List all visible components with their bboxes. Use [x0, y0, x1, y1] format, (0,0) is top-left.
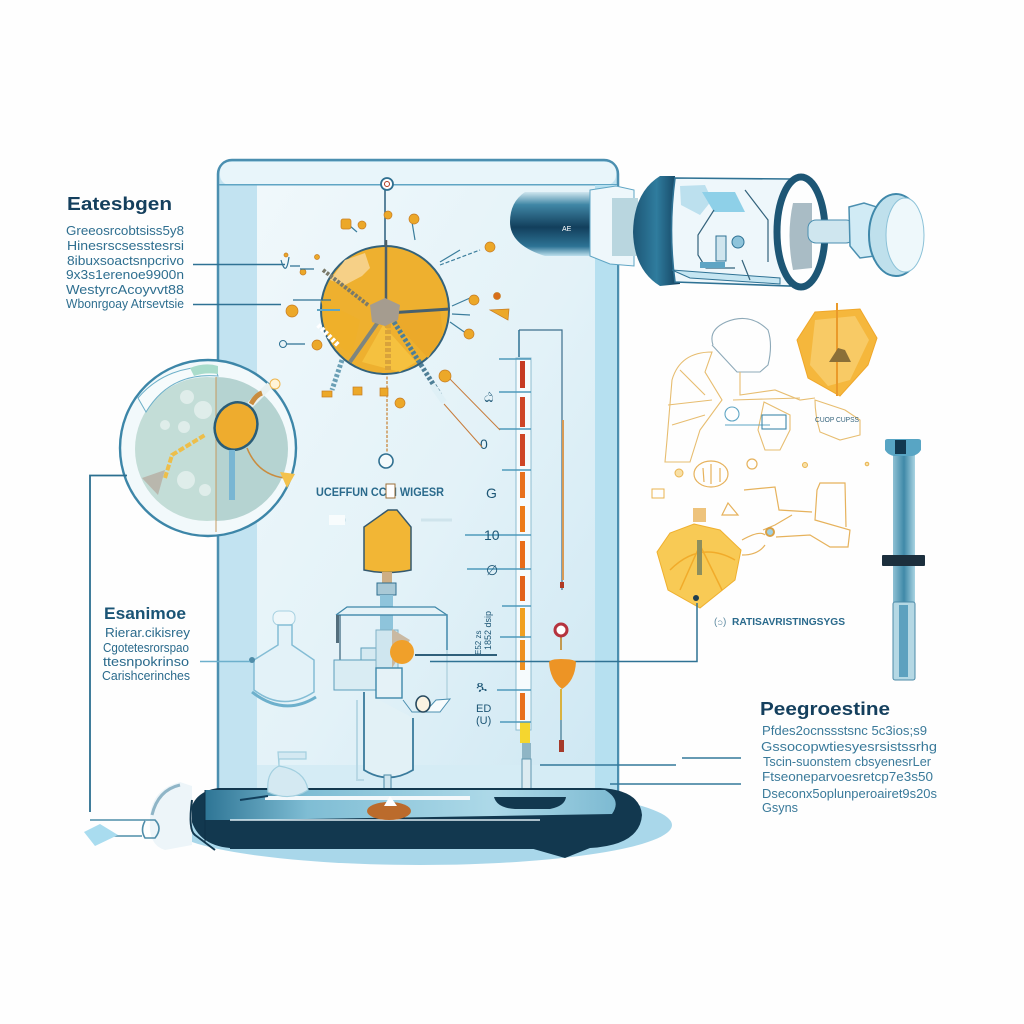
- heading: top left: Eatesbgen: [67, 194, 172, 214]
- text block: middle left: [102, 626, 191, 683]
- leader lines: bottom right: [540, 758, 741, 784]
- node: [766, 528, 774, 536]
- hub: [370, 298, 400, 326]
- small dots: [652, 462, 869, 498]
- scale labels: ඨ: [484, 389, 493, 405]
- text block: top left: Wbonrgoay Atrsevtsie: [66, 297, 184, 311]
- text block: middle left: Carishcerinches: [102, 669, 190, 683]
- heading: middle left: Esanimoe: [104, 604, 186, 623]
- scale labels: ∅: [486, 562, 498, 578]
- text block: top left: Greeosrcobtsiss5y8: [66, 224, 184, 238]
- small flask: [268, 752, 308, 797]
- text block: bottom right: Dseconx5oplunperoairet9s20s: [762, 787, 937, 801]
- label: apparatus: UCEFFUN CCPI WIGESR: [316, 487, 445, 499]
- panel: glass cabinet: [218, 160, 618, 805]
- scale labels: 0: [480, 436, 488, 452]
- icon mark: (၁): [714, 617, 726, 628]
- heading: bottom right: Peegroestine: [760, 699, 890, 719]
- gold gem: top right: [797, 303, 877, 396]
- text block: bottom right: [761, 724, 937, 815]
- scale labels: G: [486, 485, 497, 501]
- hook: base left: [84, 782, 215, 850]
- outline figure: bottom: [694, 459, 850, 555]
- sun diagram: [279, 178, 509, 468]
- probe bulb: [549, 624, 576, 752]
- amber bottle: [364, 510, 411, 572]
- text block: bottom right: Tscin-suonstem cbsyenesrLer: [763, 755, 931, 769]
- text block: bottom right: Ftseoneparvoesretcp7e3s50: [762, 770, 933, 784]
- text block: top left: 8ibuxsoactsnpcrivo: [67, 254, 184, 268]
- text block: middle left: Rierar.cikisrey: [105, 626, 191, 640]
- main cylinder: [364, 692, 413, 778]
- leader line: gem to probe: [430, 603, 697, 662]
- satellite dots: [284, 211, 509, 408]
- scale tube: [465, 330, 564, 797]
- text block: bottom right: Gsyns: [762, 801, 798, 815]
- scale labels: ED: [476, 703, 491, 715]
- scale labels: (U): [476, 715, 491, 727]
- scale labels: [476, 389, 500, 727]
- text block: bottom right: Gssocopwtiesyesrsistssrhg: [761, 740, 937, 754]
- scale labels: 10: [484, 527, 500, 543]
- label: right middle: RATISAVRISTINGSYGS: [732, 616, 845, 628]
- spokes: [317, 222, 500, 447]
- gold gem: bottom left: [657, 508, 741, 608]
- leader lines: top left: [193, 264, 285, 304]
- leader line: left flask: [200, 660, 250, 662]
- base shadow: [168, 785, 672, 865]
- text block: bottom right: Pfdes2ocnssstsnc 5c3ios;s9: [762, 724, 927, 738]
- apparatus: [329, 484, 497, 805]
- syringe: AE: [562, 226, 572, 233]
- text block: top left: 9x3s1erenoe9900n: [66, 268, 184, 282]
- leader line: lens: [90, 476, 127, 812]
- scale tube: 1852 dsip: [483, 611, 493, 650]
- text block: top left: [66, 224, 184, 311]
- pen device: [882, 439, 925, 680]
- text block: middle left: Cgotetesrorspao: [103, 641, 189, 655]
- vessel: [336, 607, 447, 615]
- text block: middle left: ttesnpokrinso: [103, 655, 189, 669]
- label: outline figure: CUOP CUPSS: [815, 415, 859, 424]
- outline figure: top: [665, 318, 860, 462]
- left flask: [249, 611, 316, 706]
- text block: top left: WestyrcAcoyvvt88: [66, 283, 184, 297]
- scale tube: E52 zs: [474, 631, 483, 655]
- scale labels: ጿ: [476, 677, 487, 693]
- lens detail circle: [120, 360, 296, 536]
- base: [190, 788, 642, 858]
- text block: top left: Hinesrscsesstesrsi: [67, 239, 184, 253]
- syringe: [510, 176, 924, 287]
